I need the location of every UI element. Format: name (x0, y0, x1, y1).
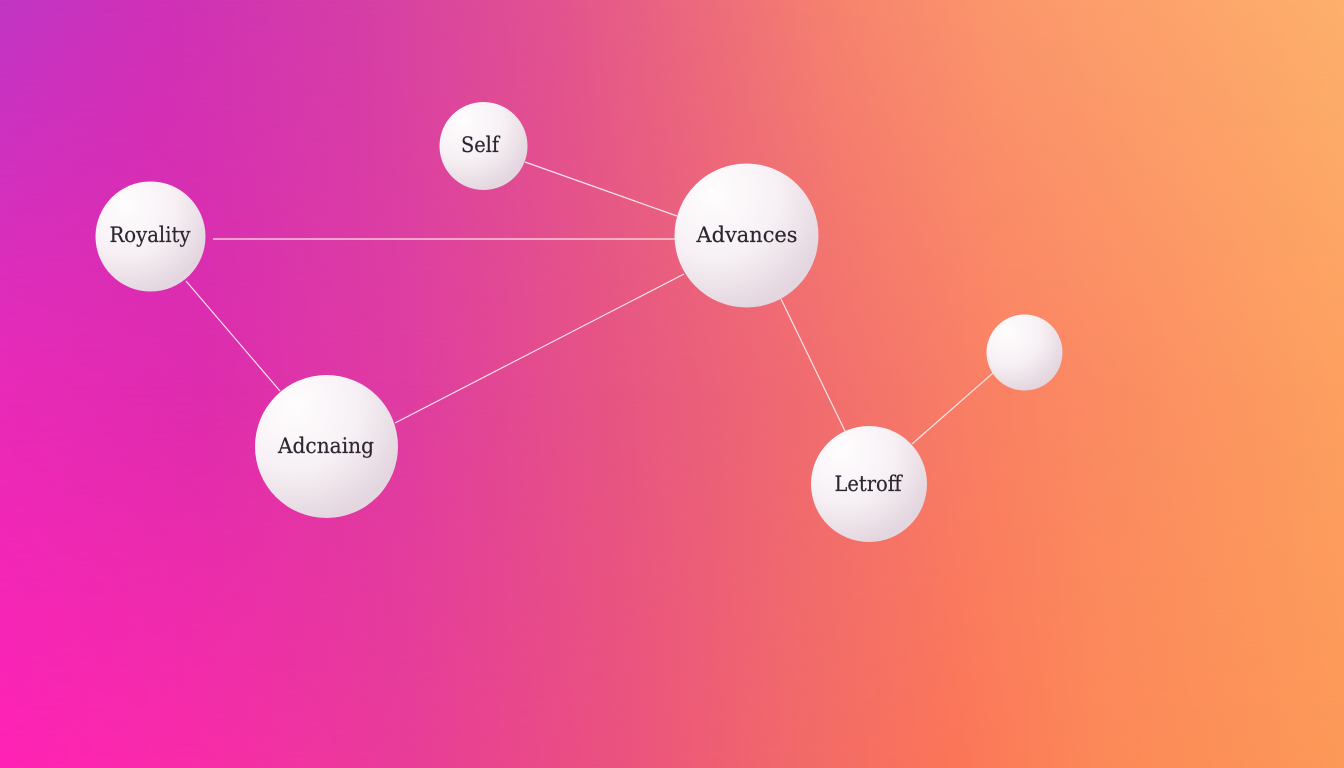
connector: Self to Advances (525, 162, 677, 216)
node: Advances: Advances (696, 223, 798, 247)
connector: Letroff to unlabeled node (912, 373, 993, 444)
node: unlabeled (986, 314, 1062, 390)
node: Royality: Royality (110, 223, 191, 247)
node: Letroff (811, 426, 927, 542)
node: Adcnaing: Adcnaing (277, 434, 374, 458)
node: Letroff: Letroff (834, 472, 903, 496)
connector: Advances to Letroff (781, 299, 845, 431)
node: Self: Self (461, 133, 501, 157)
node: Royality (96, 182, 206, 292)
node: Self (440, 102, 528, 190)
connector: Adcnaing to Advances (395, 274, 684, 423)
node: Adcnaing (255, 375, 398, 518)
node: Advances (674, 164, 818, 308)
connector: Royality to Adcnaing (186, 281, 280, 391)
connector: Royality to Advances (213, 238, 675, 240)
